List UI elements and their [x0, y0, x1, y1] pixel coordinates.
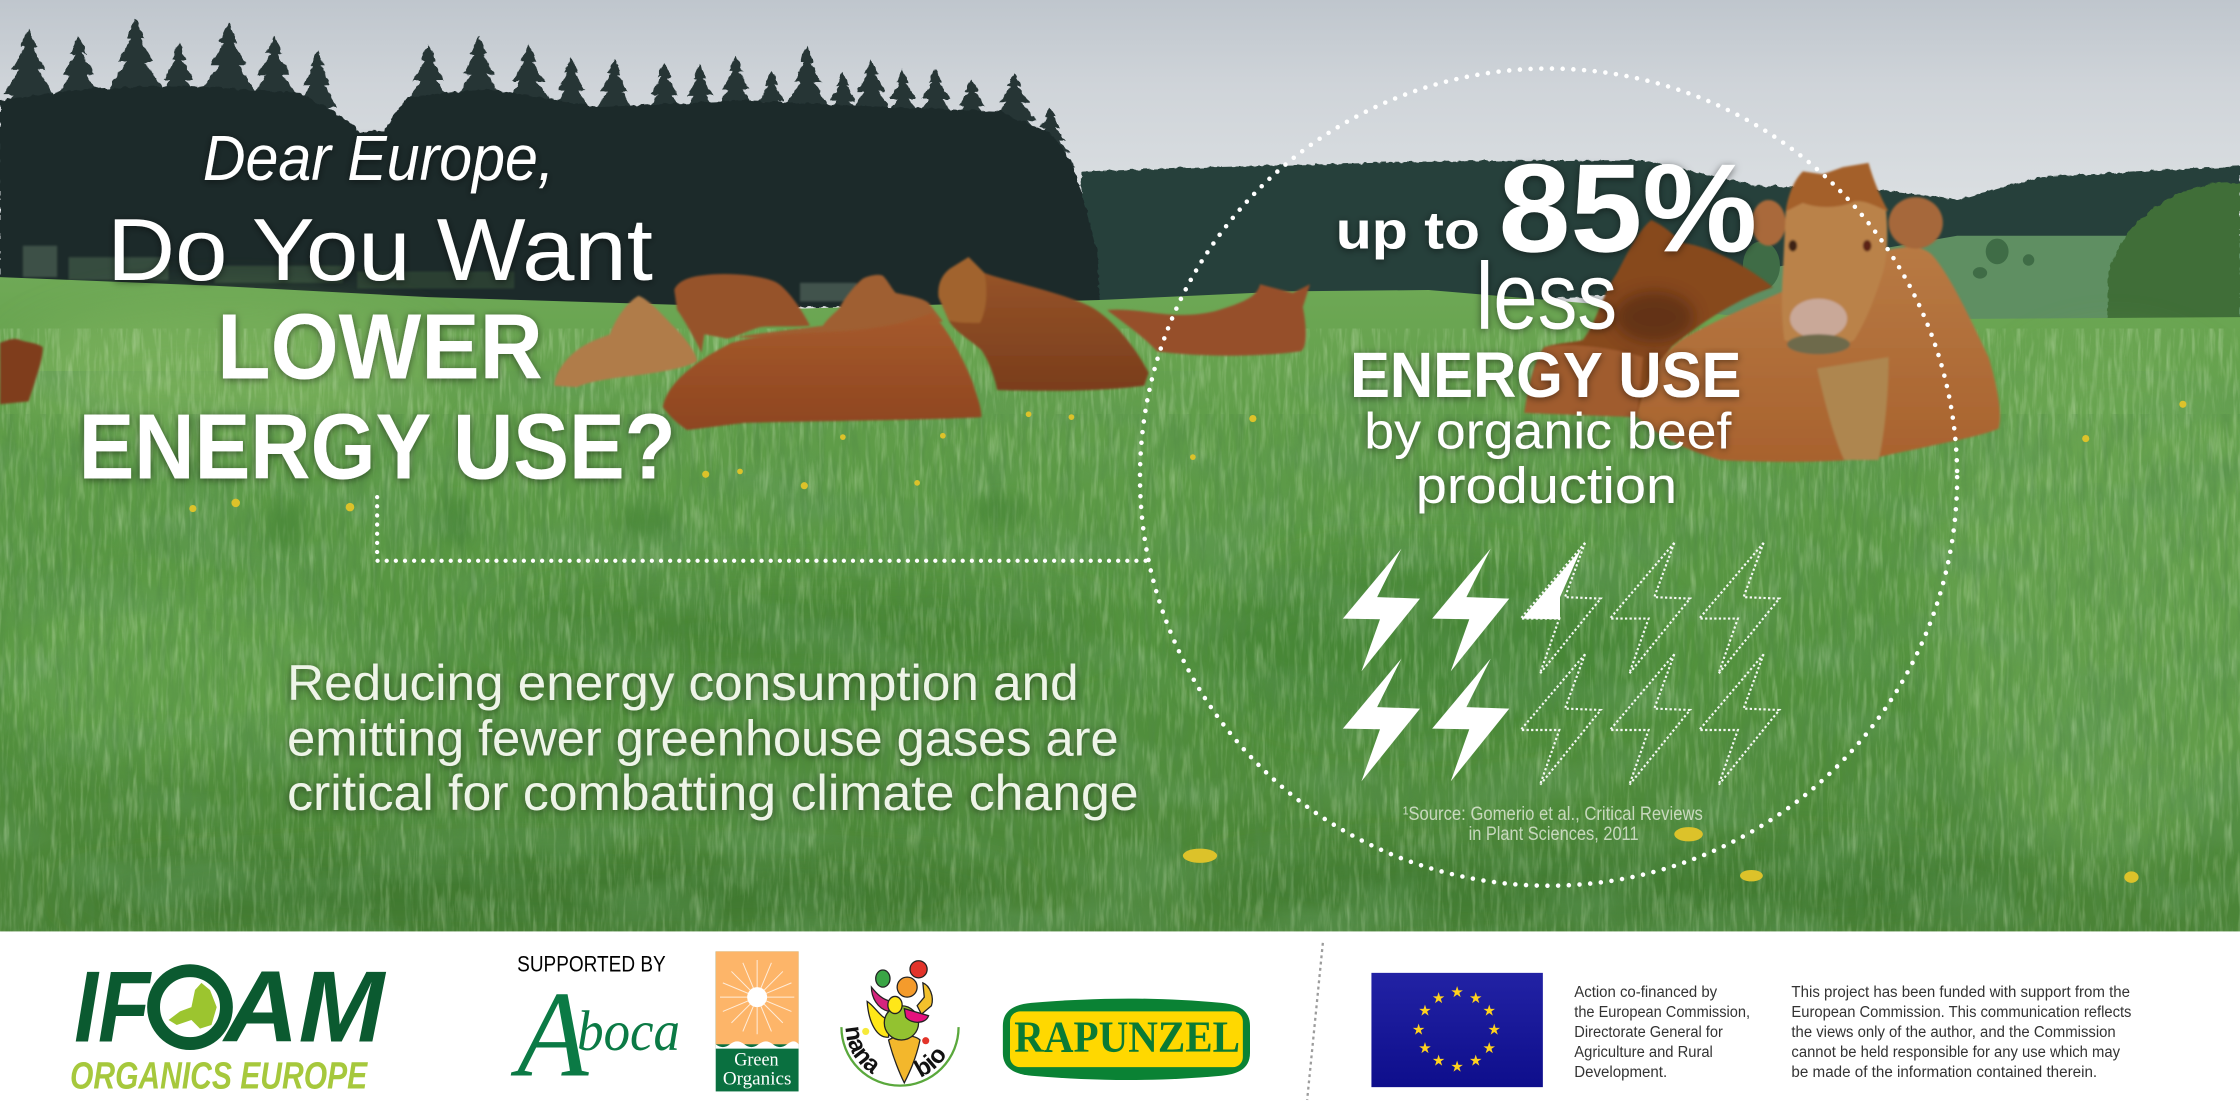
- grass patches: [0, 307, 2240, 927]
- logo flowers: [862, 1028, 869, 1035]
- cow: lying, head up: [938, 257, 1149, 391]
- EU disclaimer: cannot be held responsible for any use which may: [1791, 1044, 2120, 1061]
- EU disclaimer: European Commission. This communication reflects: [1791, 1004, 2132, 1021]
- outlined bolts: [1521, 543, 1779, 785]
- EU flag: ★: [1469, 990, 1482, 1007]
- EU flag: ★: [1432, 1053, 1445, 1070]
- body text: climate statement: emitting fewer greenhouse gases are: [287, 711, 1119, 767]
- stat: less: less: [1476, 244, 1617, 349]
- EU disclaimer: [1791, 984, 2132, 1081]
- juggling figure: [867, 961, 932, 1083]
- EU flag: [1371, 973, 1543, 1087]
- co-financing statement: the European Commission,: [1574, 1004, 1750, 1021]
- logo wordmark: [74, 950, 387, 1063]
- logo: Rapunzel: RAPUNZEL: [1014, 1012, 1240, 1061]
- co-financing statement: Directorate General for: [1574, 1024, 1723, 1041]
- co-financing statement: Development.: [1574, 1064, 1667, 1081]
- EU disclaimer: the views only of the author, and the Commission: [1791, 1024, 2116, 1041]
- logo Europe shape: [169, 983, 217, 1029]
- body text: climate statement: Reducing energy consumption and: [287, 655, 1079, 711]
- distant forest: [1081, 160, 2240, 307]
- EU flag: ★: [1450, 984, 1464, 1001]
- logo: Green Organics: Green: [734, 1050, 779, 1071]
- headline: lower: LOWER: [217, 295, 543, 399]
- logo: Aboca: [510, 967, 680, 1103]
- pine tree line: [0, 19, 1081, 186]
- meadow: [0, 277, 2240, 943]
- filled bolts: [1343, 549, 1581, 781]
- supported by label: SUPPORTED BY: [517, 951, 666, 976]
- grass arc: [841, 1027, 959, 1086]
- logo tagline: ORGANICS EUROPE: [70, 1056, 369, 1098]
- field glimpses between trunks: [23, 246, 857, 301]
- logo wordmark curved: [846, 1027, 954, 1081]
- stat: up to: up to: [1336, 202, 1480, 261]
- logo: Aboca: boca: [577, 1000, 680, 1063]
- logo: nana bio: nana: [846, 1027, 878, 1074]
- cow: large lying: [663, 313, 981, 430]
- EU flag: ★: [1418, 1040, 1432, 1057]
- stat: by organic beef production: by organic beef: [1364, 402, 1732, 460]
- stat: 85 percent: 85%: [1499, 137, 1757, 278]
- source note: in Plant Sciences, 2011: [1469, 824, 1639, 845]
- footer band: [0, 931, 2240, 1120]
- cow: back middle: [736, 275, 943, 343]
- co-financing statement: [1574, 984, 1750, 1081]
- dotted circle highlight: [1140, 69, 1957, 886]
- headline: energy use: ENERGY USE?: [79, 395, 676, 499]
- EU flag: ★: [1483, 1040, 1496, 1057]
- EU flag: ★: [1418, 1003, 1432, 1020]
- EU disclaimer: be made of the information contained therein.: [1791, 1064, 2097, 1081]
- icons: lightning bolts, 5 of 10 filled: [1343, 543, 1779, 785]
- grass shadow texture: [0, 414, 2240, 936]
- logo globe ring: [154, 971, 226, 1044]
- EU flag: ★: [1488, 1021, 1501, 1038]
- EU flag: ★: [1450, 1058, 1464, 1075]
- cow: front portrait: [1637, 163, 2000, 462]
- source note: [1403, 804, 1703, 845]
- grass mottling: [0, 371, 2240, 936]
- grass blade texture: [0, 329, 2240, 936]
- EU flag: ★: [1469, 1053, 1482, 1070]
- dotted connector from headline to circle: [377, 497, 1146, 561]
- logo: IFOAM Organics Europe: [70, 950, 387, 1098]
- EU flag: ★: [1412, 1021, 1425, 1038]
- EU flag: ★: [1483, 1003, 1496, 1020]
- headline: question: Do You Want: [107, 200, 653, 299]
- logo: nana bio: [840, 960, 960, 1087]
- logo: Rapunzel: [1003, 999, 1250, 1080]
- dark grass tufts: [267, 494, 1029, 551]
- logo wordmark: IF: [74, 950, 153, 1063]
- stat: by organic beef production: [1364, 402, 1732, 514]
- distant fields: [1614, 236, 2240, 326]
- EU flag: ★: [1432, 990, 1445, 1007]
- logo wordmark: AM: [221, 950, 387, 1063]
- distant tree on right: [2107, 183, 2240, 320]
- body text: climate statement: critical for combatting climate change: [287, 765, 1139, 821]
- stat: energy use: ENERGY USE: [1350, 339, 1741, 411]
- stat: by organic beef production: production: [1416, 456, 1677, 514]
- cow: far left: [0, 339, 43, 404]
- distant bushes: [1743, 239, 2034, 290]
- source note: ¹Source: Gomerio et al., Critical Reviews: [1403, 804, 1703, 825]
- footer divider: [1307, 943, 1323, 1100]
- logo: Green Organics: [716, 951, 799, 1091]
- EU disclaimer: This project has been funded with support from the: [1791, 984, 2130, 1001]
- logo: Green Organics: Organics: [723, 1068, 791, 1089]
- headline: [79, 122, 676, 499]
- headline: salutation: Dear Europe,: [203, 122, 554, 194]
- cow: far right group: [1107, 284, 1310, 356]
- logo: Aboca: A: [510, 967, 589, 1103]
- cow: pale resting: [554, 296, 697, 387]
- sky: [0, 0, 2240, 343]
- statistic: 85% less energy use: [1336, 137, 1757, 514]
- logo: nana bio: bio: [914, 1050, 945, 1078]
- cow: standing back: [674, 274, 810, 353]
- dense lower tree mass: [0, 86, 1100, 307]
- body text: climate statement: [287, 655, 1139, 821]
- co-financing statement: Action co-financed by: [1574, 984, 1717, 1001]
- dandelions: [189, 401, 2186, 883]
- cow: behind front cow: [1524, 220, 1773, 417]
- co-financing statement: Agriculture and Rural: [1574, 1044, 1713, 1061]
